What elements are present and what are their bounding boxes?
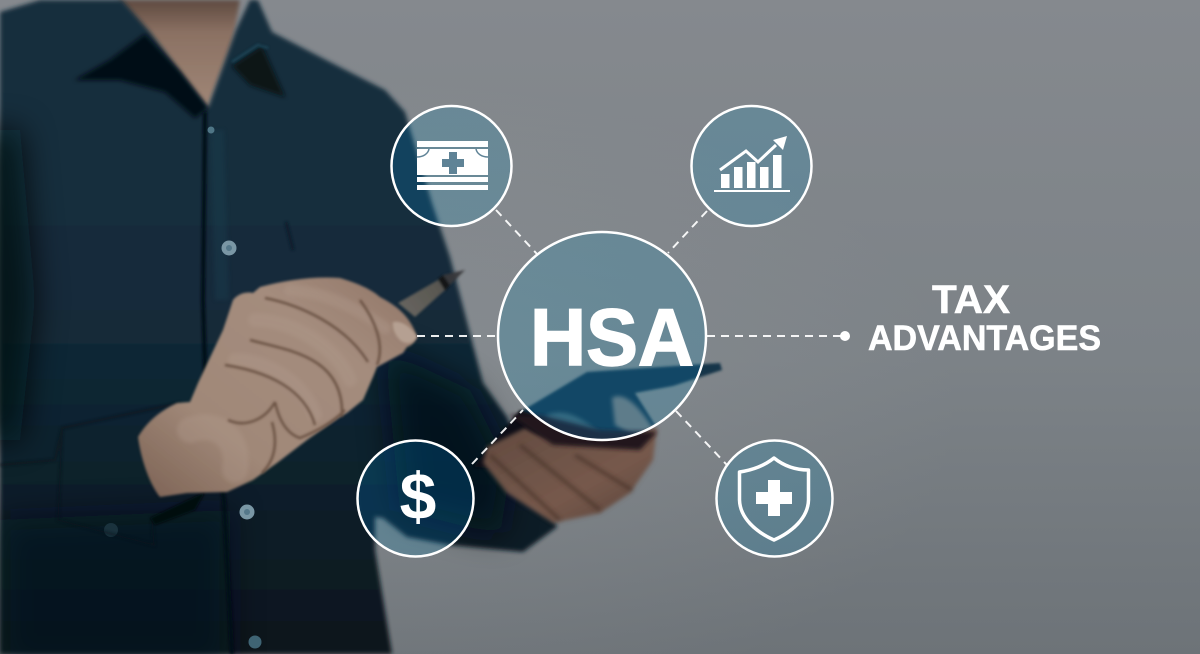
center circle: HSA	[498, 232, 706, 440]
shirt body and sleeves	[0, 0, 557, 654]
icon circle: medical cash	[392, 106, 512, 226]
icon circle: health shield	[716, 440, 832, 556]
label: tax advantages: TAX	[932, 278, 1010, 322]
icon: banknote with cross	[417, 141, 488, 190]
shirt buttons	[208, 126, 214, 134]
neck	[118, 0, 240, 108]
icon circle: growth chart	[692, 106, 812, 226]
center circle: HSA: HSA	[530, 293, 694, 383]
sleeve and cuff	[0, 403, 180, 545]
collar shadow	[75, 34, 208, 118]
thumb on tablet	[612, 396, 655, 440]
photo: person in dark shirt	[0, 0, 722, 654]
dashed connector lines	[417, 210, 845, 465]
icon circle: dollar: $	[400, 459, 436, 533]
pen	[358, 270, 465, 350]
icon: shield with cross	[740, 458, 808, 540]
fingernail	[393, 322, 417, 343]
finger creases	[225, 298, 380, 473]
label: tax advantages: ADVANTAGES	[868, 319, 1101, 358]
lower hand holding tablet	[483, 427, 657, 523]
icon: bar chart with rising arrow	[714, 136, 790, 192]
button placket	[203, 112, 232, 654]
soft finger highlights	[190, 290, 385, 470]
shirt shading	[0, 130, 510, 654]
icon circle: dollar	[358, 440, 474, 556]
label: tax advantages	[868, 278, 1101, 358]
tablet	[520, 363, 722, 440]
pocket	[286, 222, 293, 250]
writing hand	[138, 277, 417, 497]
connector end dot	[840, 331, 850, 341]
